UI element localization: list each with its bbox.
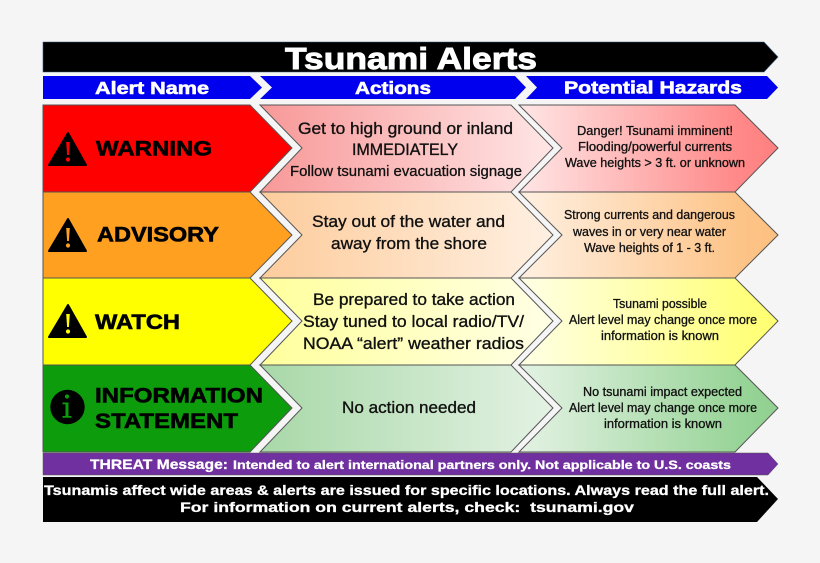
alert name: information statement: [43, 365, 292, 452]
hazards: watch: Tsunami possible: [613, 297, 707, 311]
hazards: information statement: Alert level may change once more: [569, 401, 757, 415]
column header: Actions: Actions: [355, 78, 431, 98]
column header: Alert Name: [43, 76, 262, 99]
icon: information circle: [50, 390, 85, 424]
actions: information statement: [260, 365, 553, 452]
threat message banner: THREAT Message:: [90, 456, 228, 472]
hazards: watch: Alert level may change once more: [569, 313, 757, 327]
actions: advisory: away from the shore: [331, 234, 487, 253]
threat message banner: Intended to alert international partners only. Not applicable to U.S. coasts: [233, 458, 731, 472]
actions: warning: IMMEDIATELY: [352, 140, 458, 159]
hazards: warning: Danger! Tsunami imminent!: [577, 124, 733, 138]
actions: warning: [260, 105, 553, 192]
hazards: warning: Flooding/powerful currents: [578, 140, 732, 154]
icon: warning triangle: [49, 133, 86, 165]
actions: warning: Follow tsunami evacuation signage: [290, 163, 522, 180]
row: information statement: [43, 365, 778, 452]
hazards: warning: [519, 105, 778, 192]
footer banner: For information on current alerts, check: tsunami.gov: [180, 499, 634, 515]
footer banner: [43, 477, 778, 522]
column header: Alert Name: Alert Name: [95, 78, 209, 98]
row: advisory: [43, 192, 778, 278]
hazards: information statement: [519, 365, 778, 452]
hazards: watch: information is known: [601, 329, 719, 343]
row: watch: [43, 278, 778, 365]
actions: warning: Get to high ground or inland: [298, 119, 513, 138]
actions: advisory: Stay out of the water and: [312, 212, 505, 231]
icon: watch triangle: [49, 305, 86, 337]
hazards: advisory: [519, 192, 778, 278]
alert name: watch: [43, 278, 292, 365]
hazards: advisory: Strong currents and dangerous: [564, 208, 735, 222]
alert name: advisory: ADVISORY: [97, 224, 219, 246]
hazards: information statement: information is known: [604, 417, 722, 431]
actions: watch: Stay tuned to local radio/TV/: [303, 312, 524, 331]
alert name: advisory: [43, 192, 292, 278]
alert name: warning: [43, 105, 292, 192]
alert name: information statement: INFORMATION: [95, 384, 263, 408]
alert name: information statement: STATEMENT: [95, 410, 238, 433]
column header: Potential Hazards: [526, 76, 778, 99]
icon: advisory triangle: [49, 219, 86, 251]
footer banner: Tsunamis affect wide areas & alerts are issued for specific locations. Always read the full alert.: [44, 482, 769, 498]
hazards: information statement: No tsunami impact expected: [583, 385, 742, 399]
alert name: warning: WARNING: [96, 138, 212, 160]
alert name: watch: WATCH: [95, 311, 180, 334]
column header: Potential Hazards: Potential Hazards: [564, 78, 742, 98]
title banner: Tsunami Alerts: [285, 41, 537, 76]
hazards: watch: [519, 278, 778, 365]
row: warning: [43, 105, 778, 192]
actions: watch: [260, 278, 553, 365]
actions: watch: Be prepared to take action: [313, 290, 515, 309]
hazards: advisory: Wave heights of 1 - 3 ft.: [584, 241, 715, 255]
actions: watch: NOAA “alert” weather radios: [303, 334, 524, 353]
title banner: [43, 41, 778, 76]
actions: information statement: No action needed: [342, 398, 476, 417]
hazards: warning: Wave heights > 3 ft. or unknown: [565, 156, 745, 170]
actions: advisory: [260, 192, 553, 278]
threat message banner: [43, 453, 778, 475]
column header: Actions: [260, 76, 526, 99]
hazards: advisory: waves in or very near water: [572, 225, 726, 239]
